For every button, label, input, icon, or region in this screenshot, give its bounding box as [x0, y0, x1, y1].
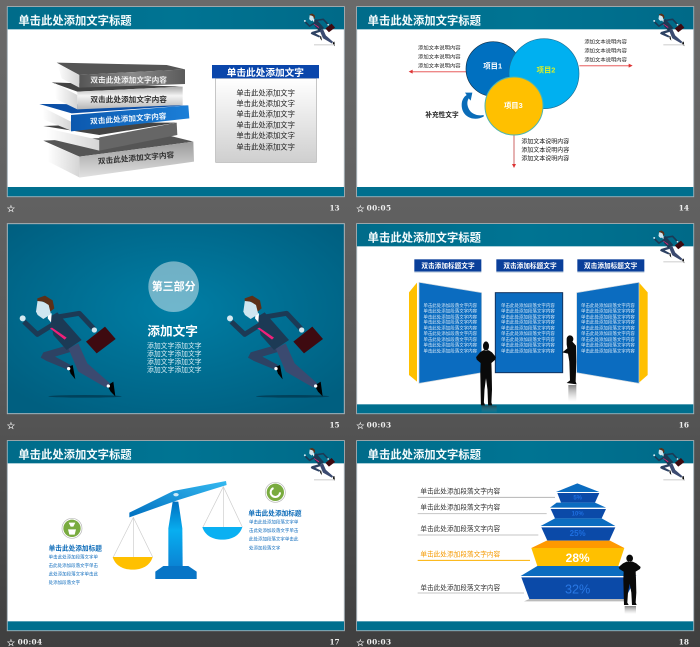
- arrow: left: [409, 70, 467, 74]
- body text: 添加文字添加文字: [147, 365, 202, 374]
- text: left block: 此处添加段落文字单击此: [49, 571, 99, 578]
- circle: item 2: 项目2: [537, 66, 555, 75]
- base: [155, 566, 197, 579]
- slide frame: [7, 7, 344, 197]
- text: bottom notes: 添加文本说明内容: [521, 138, 569, 146]
- icon: runner: [653, 448, 684, 481]
- panel: text card: 单击此处添加文字: [236, 131, 295, 140]
- scale: [113, 481, 242, 579]
- panel: center: 单击此处添加段落文字内容: [501, 302, 555, 309]
- label: left: [414, 259, 481, 273]
- panel: center: 单击此处添加段落文字内容: [501, 325, 555, 332]
- footer bar: [357, 187, 693, 196]
- panel: left: [409, 282, 482, 383]
- runner: right: [227, 296, 329, 398]
- text: right block: 单击此处添加段落文字单: [249, 519, 299, 526]
- text: right notes: 添加文本说明内容: [584, 55, 628, 63]
- panel: center: 单击此处添加段落文字内容: [501, 319, 555, 326]
- footer info: [356, 203, 689, 215]
- panel: left: 单击此处添加段落文字内容: [423, 347, 478, 354]
- book stack: [39, 63, 194, 178]
- panel: left: 单击此处添加段落文字内容: [423, 330, 478, 337]
- silhouette: man: [619, 555, 641, 614]
- panel: text card: [212, 65, 319, 162]
- text: bottom notes: 添加文本说明内容: [521, 154, 569, 162]
- footer info: 18: [679, 637, 689, 646]
- header bar: [357, 7, 693, 29]
- footer info: 00:03: [367, 637, 391, 646]
- panel: center: 单击此处添加段落文字内容: [501, 347, 555, 354]
- body text: 添加文字添加文字: [147, 341, 202, 350]
- panel: right: [577, 282, 648, 383]
- silhouette: right man: [562, 335, 577, 402]
- arrow: down: [512, 135, 516, 168]
- slide 16: three panels: [356, 224, 694, 432]
- footer bar: [8, 621, 344, 630]
- book 5: 双击此处添加文字内容: [97, 149, 175, 166]
- leader labels: 单击此处添加段落文字内容: [420, 583, 501, 592]
- slide 13: stacked books: [7, 7, 344, 215]
- heading: 添加文字: [147, 324, 198, 339]
- title: 单击此处添加文字标题: [368, 14, 482, 28]
- pyramid tier: 28%: [531, 541, 624, 566]
- circle: item 3: 项目3: [504, 101, 523, 110]
- pyramid tier: 25%: [541, 518, 615, 541]
- leader labels: 单击此处添加段落文字内容: [420, 486, 501, 495]
- slide 14: overlapping circles: [356, 7, 694, 215]
- panel: right: 单击此处添加段落文字内容: [581, 325, 635, 332]
- slide frame: [357, 441, 694, 631]
- text: right block: 击此处添加段落文字单击: [249, 527, 299, 534]
- panel: right: 单击此处添加段落文字内容: [581, 313, 635, 320]
- panel: center: 单击此处添加段落文字内容: [501, 330, 555, 337]
- book 2: [52, 82, 183, 109]
- circle badge: [148, 261, 199, 312]
- pyramid tier: 5%: 5%: [573, 496, 583, 502]
- circle badge: 第三部分: [152, 279, 196, 293]
- panel: center: 单击此处添加段落文字内容: [501, 307, 555, 314]
- circle: item 1: 项目1: [483, 62, 502, 71]
- footer info: 00:05: [367, 203, 391, 212]
- slide background: [7, 224, 344, 414]
- pan: yellow: [113, 557, 153, 570]
- footer info: 16: [679, 420, 689, 429]
- footer info: [356, 637, 689, 647]
- panel: center: 单击此处添加段落文字内容: [501, 341, 555, 348]
- panel: left: 单击此处添加段落文字内容: [423, 319, 478, 326]
- circle: item 2: [509, 39, 579, 109]
- runner: left: [20, 296, 122, 398]
- side label: 补充性文字: [425, 110, 459, 119]
- body text: 添加文字添加文字: [147, 349, 202, 358]
- panel: right: 单击此处添加段落文字内容: [581, 347, 635, 354]
- text: right notes: 添加文本说明内容: [584, 37, 628, 45]
- panel: center: 单击此处添加段落文字内容: [501, 313, 555, 320]
- panel: right: 单击此处添加段落文字内容: [581, 307, 635, 314]
- pyramid tier: 5%: [556, 483, 599, 503]
- pyramid tier: 10%: [550, 503, 606, 518]
- panel: right: 单击此处添加段落文字内容: [581, 302, 635, 309]
- header bar: [357, 441, 693, 463]
- text: right block: 处添加段落文字: [249, 544, 281, 551]
- panel: text card: 单击此处添加文字: [236, 109, 295, 118]
- panel: left: 单击此处添加段落文字内容: [423, 307, 478, 314]
- icon: runner: [304, 448, 335, 481]
- pan: blue: [202, 527, 242, 540]
- panel: left: 单击此处添加段落文字内容: [423, 336, 478, 343]
- label: center: 双击添加标题文字: [503, 261, 557, 270]
- text: left notes: 添加文本说明内容: [418, 52, 461, 60]
- label: left: 双击添加标题文字: [421, 261, 475, 270]
- leader labels: 单击此处添加段落文字内容: [420, 524, 501, 533]
- title: 单击此处添加文字标题: [18, 14, 132, 28]
- text: right block: 此处添加段落文字单击此: [249, 536, 299, 543]
- body text: 添加文字添加文字: [147, 357, 202, 366]
- footer info: [7, 637, 340, 647]
- text: left notes: 添加文本说明内容: [418, 43, 461, 51]
- footer info: 14: [679, 203, 689, 212]
- panel: left: 单击此处添加段落文字内容: [423, 341, 478, 348]
- panel: text card: 单击此处添加文字: [227, 67, 304, 79]
- footer info: 00:04: [18, 637, 42, 646]
- book 4: [43, 123, 177, 151]
- panel: left: 单击此处添加段落文字内容: [423, 313, 478, 320]
- footer info: 17: [329, 637, 340, 646]
- pyramid tier: 32%: 32%: [565, 583, 590, 597]
- text: left block: 单击此处添加段落文字单: [49, 554, 99, 561]
- text: right notes: [584, 37, 628, 63]
- pyramid tier: 25%: 25%: [570, 529, 586, 538]
- post: [168, 502, 183, 566]
- curved arrow: [462, 93, 484, 119]
- text: right block: [248, 509, 302, 551]
- panel: right: 单击此处添加段落文字内容: [581, 319, 635, 326]
- footer bar: [8, 187, 344, 196]
- leader labels: [418, 486, 555, 593]
- book 3 blue: 双击此处添加文字内容: [90, 111, 167, 126]
- book 1: [57, 63, 185, 88]
- footer info: [7, 420, 340, 432]
- footer bar: [357, 404, 693, 413]
- leader labels: 单击此处添加段落文字内容: [420, 550, 501, 559]
- panel: text card: 单击此处添加文字: [236, 88, 295, 97]
- arrow: right: [579, 64, 633, 68]
- text: left block: 单击此处添加标题: [49, 544, 102, 553]
- book 3 blue: [39, 104, 189, 131]
- title: 单击此处添加文字标题: [18, 448, 132, 462]
- text: left block: [49, 544, 102, 586]
- icon: runner: [653, 14, 684, 46]
- book 1: 双击此处添加文字内容: [90, 74, 167, 84]
- pyramid tier: 28%: 28%: [566, 551, 590, 565]
- icon: puzzle badge: [62, 518, 82, 538]
- panel: right: 单击此处添加段落文字内容: [581, 336, 635, 343]
- silhouette: left man: [476, 341, 497, 413]
- body text: [147, 341, 202, 374]
- title: 单击此处添加文字标题: [368, 231, 482, 245]
- text: left notes: 添加文本说明内容: [418, 61, 461, 69]
- text: bottom notes: [521, 138, 569, 162]
- footer info: [356, 420, 689, 432]
- icon: swirl badge: [265, 482, 285, 502]
- header bar: [8, 7, 344, 29]
- strings: [113, 487, 242, 557]
- footer info: 15: [329, 420, 340, 429]
- text: bottom notes: 添加文本说明内容: [521, 146, 569, 154]
- icon: runner: [653, 231, 684, 263]
- panel: text card: 单击此处添加文字: [236, 99, 295, 108]
- label: right: [577, 259, 644, 273]
- panel: center: 单击此处添加段落文字内容: [501, 336, 555, 343]
- footer info: ☆: [7, 421, 16, 432]
- label: right: 双击添加标题文字: [584, 261, 638, 270]
- pyramid tier: 32%: [521, 566, 637, 601]
- slide 15: section divider: [7, 224, 344, 432]
- footer info: ☆: [356, 204, 365, 215]
- circle: item 3: [485, 77, 543, 135]
- panel: text card: 单击此处添加文字: [236, 142, 295, 151]
- text: left block: 击此处添加段落文字单击: [49, 562, 99, 569]
- panel: left: 单击此处添加段落文字内容: [423, 325, 478, 332]
- circle: item 1: [466, 42, 521, 96]
- slide 17: balance scale: [7, 441, 344, 647]
- header bar: [357, 224, 693, 246]
- slide frame: [7, 441, 344, 631]
- header bar: [8, 441, 344, 463]
- footer info: 13: [329, 203, 340, 212]
- slide frame: [357, 224, 694, 414]
- footer bar: [357, 621, 693, 630]
- footer info: ☆: [356, 421, 365, 432]
- book 5: [43, 135, 194, 178]
- panel: right: 单击此处添加段落文字内容: [581, 341, 635, 348]
- icon: runner: [304, 14, 335, 46]
- slide frame: [357, 7, 694, 197]
- footer info: 00:03: [367, 420, 391, 429]
- beam: [129, 481, 227, 517]
- text: left block: 处添加段落文字: [49, 579, 81, 586]
- panel: left: 单击此处添加段落文字内容: [423, 302, 478, 309]
- text: right notes: 添加文本说明内容: [584, 46, 628, 54]
- panel: center: [495, 293, 563, 373]
- book 2: 双击此处添加文字内容: [90, 94, 167, 104]
- pyramid tier: 10%: 10%: [572, 511, 584, 517]
- panel: text card: 单击此处添加文字: [236, 120, 295, 129]
- footer info: [7, 203, 340, 215]
- footer info: ☆: [7, 204, 16, 215]
- slide 18: pyramid: [356, 441, 694, 647]
- leader labels: 单击此处添加段落文字内容: [420, 502, 501, 511]
- text: left notes: [418, 43, 461, 69]
- text: right block: 单击此处添加标题: [248, 509, 302, 518]
- label: center: [496, 259, 563, 273]
- title: 单击此处添加文字标题: [368, 448, 482, 462]
- panel: right: 单击此处添加段落文字内容: [581, 330, 635, 337]
